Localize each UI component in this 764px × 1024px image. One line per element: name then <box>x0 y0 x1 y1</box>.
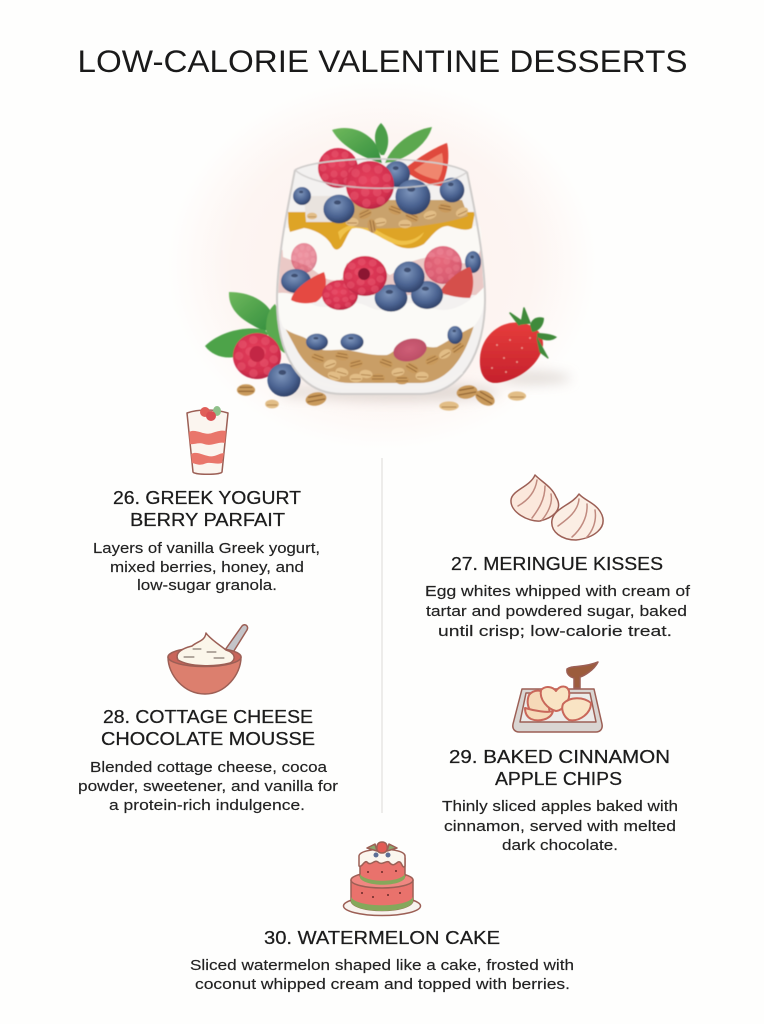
heading: 26. GREEK YOGURT <box>113 487 301 508</box>
loose strawberry <box>480 308 557 383</box>
embedded bottom berries <box>306 326 463 365</box>
honey band <box>288 212 475 250</box>
item 29: baked cinnamon apple chips: APPLE CHIPS <box>495 768 622 789</box>
heading: 29. BAKED CINNAMON <box>449 746 670 767</box>
divider <box>382 458 383 813</box>
icon: parfait cup <box>187 406 228 474</box>
icon: watermelon cake <box>344 842 420 916</box>
background glow <box>167 80 597 450</box>
glass highlights <box>295 170 467 188</box>
loose raspberry <box>233 333 281 379</box>
top granola <box>304 196 470 234</box>
heading: 27. MERINGUE KISSES <box>451 553 663 574</box>
item 27: meringue kisses: tartar and powdered sugar, baked <box>426 603 687 620</box>
description: Blended cottage cheese, cocoa <box>90 759 328 776</box>
glass back <box>277 159 485 394</box>
item 28: cottage cheese chocolate mousse: a protein-rich indulgence. <box>109 797 305 814</box>
item 28: cottage cheese chocolate mousse <box>78 625 338 814</box>
upper yogurt layer <box>283 226 481 280</box>
item 29: baked cinnamon apple chips: cinnamon, served with melted <box>444 818 676 835</box>
item 30: watermelon cake <box>190 842 574 993</box>
item 28: cottage cheese chocolate mousse: powder, sweetener, and vanilla for <box>78 778 338 795</box>
yogurt bottom layer <box>278 287 485 355</box>
item 29: baked cinnamon apple chips: dark chocolate. <box>502 837 618 854</box>
top mint <box>332 123 432 163</box>
table shadows <box>280 372 571 401</box>
parfait photo illustration <box>205 123 571 411</box>
middle berry layer <box>281 243 481 312</box>
title: LOW-CALORIE VALENTINE DESSERTS <box>78 43 688 79</box>
item 27: meringue kisses: until crisp; low-calorie treat. <box>438 623 672 640</box>
heading: 28. COTTAGE CHEESE <box>103 706 313 727</box>
item 26: Greek yogurt berry parfait: low-sugar granola. <box>137 577 277 594</box>
loose granola <box>237 384 526 411</box>
loose blueberry <box>267 363 301 397</box>
icon: apple chips on tray <box>513 662 602 732</box>
icon: meringues <box>511 475 603 540</box>
loose mint leaves <box>205 292 291 358</box>
item 26: Greek yogurt berry parfait <box>93 406 320 594</box>
item 27: meringue kisses <box>425 475 691 640</box>
granola layer bottom <box>284 325 474 383</box>
item 26: Greek yogurt berry parfait: BERRY PARFAIT <box>130 509 285 530</box>
description: Layers of vanilla Greek yogurt, <box>93 540 320 557</box>
top fruit <box>293 143 464 223</box>
description: Thinly sliced apples baked with <box>442 798 678 815</box>
description: Egg whites whipped with cream of <box>425 583 691 600</box>
heading: 30. WATERMELON CAKE <box>264 927 500 948</box>
icon: bowl of mousse <box>168 625 248 694</box>
item 29: baked cinnamon apple chips <box>442 662 678 854</box>
item 26: Greek yogurt berry parfait: mixed berries, honey, and <box>110 559 304 576</box>
berry layer backing <box>278 250 484 295</box>
description: Sliced watermelon shaped like a cake, frosted with <box>190 957 574 974</box>
item 30: watermelon cake: coconut whipped cream and topped with berries. <box>195 976 570 993</box>
item 28: cottage cheese chocolate mousse: CHOCOLATE MOUSSE <box>101 728 315 749</box>
